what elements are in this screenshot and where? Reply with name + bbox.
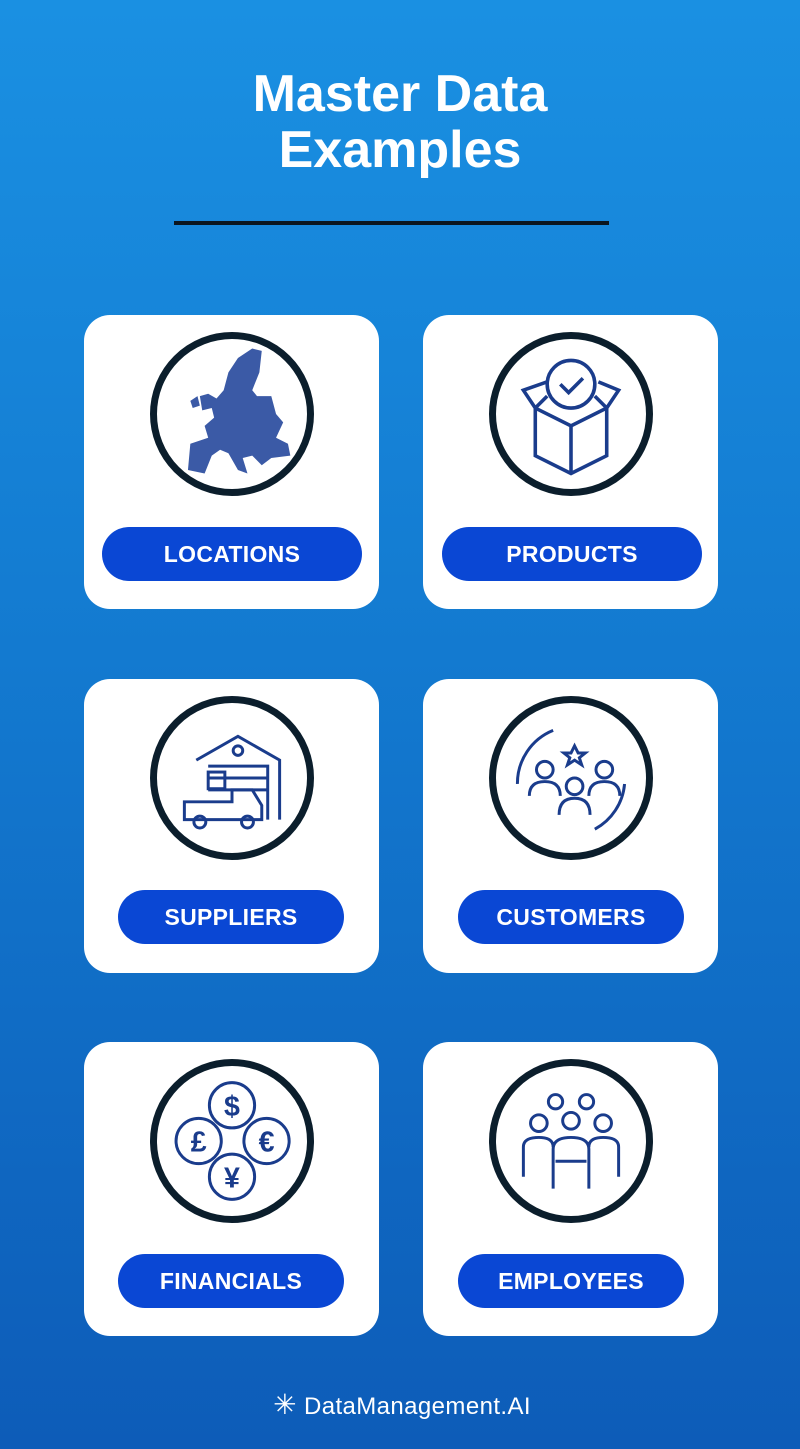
label: FINANCIALS	[160, 1268, 302, 1294]
footer logo: ✳	[273, 1389, 297, 1420]
icon: customers	[489, 696, 653, 860]
icon: warehouse truck	[150, 696, 314, 860]
panel: customers	[423, 679, 718, 973]
icon: box	[489, 332, 653, 496]
panel: suppliers	[84, 679, 379, 973]
panel: products	[423, 315, 718, 609]
panel: financials	[84, 1042, 379, 1336]
label: PRODUCTS	[506, 541, 638, 567]
icon: currencies: ¥	[224, 1162, 240, 1194]
label	[458, 1254, 684, 1308]
panel: employees	[423, 1042, 718, 1336]
label	[442, 527, 702, 581]
title: Examples	[279, 121, 521, 179]
label	[118, 1254, 344, 1308]
icon: currencies	[150, 1059, 314, 1223]
icon: currencies: €	[259, 1127, 275, 1159]
label: CUSTOMERS	[496, 904, 646, 930]
title	[253, 65, 548, 179]
label	[118, 890, 344, 944]
label	[458, 890, 684, 944]
label: SUPPLIERS	[164, 904, 298, 930]
footer logo: DataManagement.AI	[304, 1393, 531, 1420]
icon: currencies: £	[191, 1127, 207, 1159]
panel: locations	[84, 315, 379, 609]
title: Master Data	[253, 65, 547, 123]
icon: europe map	[150, 332, 314, 496]
label: EMPLOYEES	[498, 1268, 644, 1294]
icon: currencies: $	[224, 1091, 240, 1123]
label: LOCATIONS	[164, 541, 300, 567]
icon: employees	[489, 1059, 653, 1223]
label	[102, 527, 362, 581]
